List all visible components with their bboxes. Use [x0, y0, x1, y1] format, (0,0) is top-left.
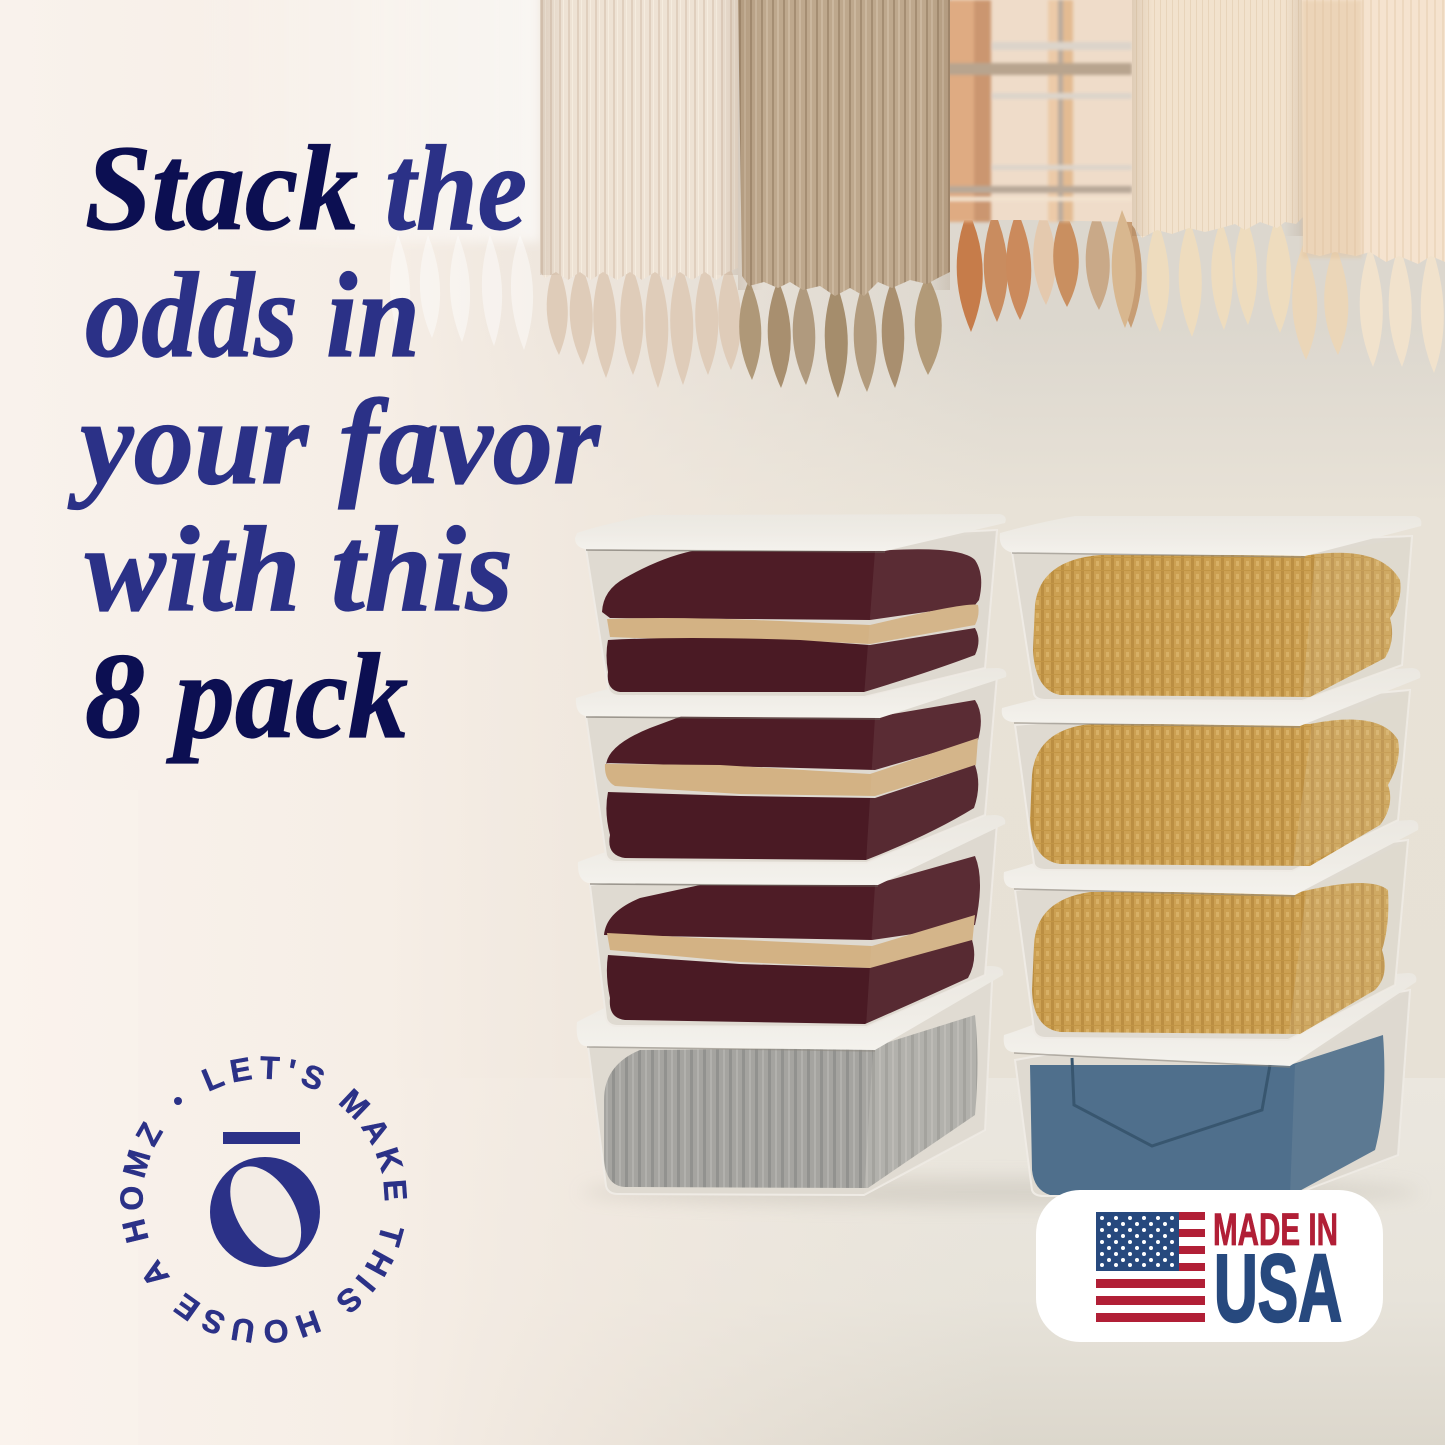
left stack, box 3: burgundy and tan [578, 815, 1005, 1027]
floor shadow under the box stacks [580, 1178, 1420, 1206]
badge wording: USA [1214, 1235, 1342, 1342]
scarf D: peach rib [1112, 0, 1305, 337]
scarves hanging along the top [190, 0, 1445, 398]
headline: the [385, 121, 527, 256]
badge wording: MADE IN [1213, 1204, 1338, 1255]
badge: Made in USA [1036, 1190, 1383, 1342]
headline: 8 pack [85, 629, 408, 764]
scarf C: plaid [944, 0, 1142, 332]
scarf E: peach rib at right edge [1292, 0, 1445, 373]
brand seal: Let's make this house a Homz [120, 1056, 408, 1343]
faded white scarves [190, 0, 540, 350]
scarf B: taupe rib [738, 0, 950, 398]
logo mark: O with macron [210, 1132, 320, 1270]
left stack, box 4: grey knit [577, 966, 1003, 1195]
badge wording [1213, 1204, 1342, 1342]
headline [67, 121, 602, 764]
headline: with this [85, 502, 513, 637]
right stack, box 4: denim [1004, 973, 1416, 1196]
left stack, box 2: burgundy and tan [576, 668, 1006, 863]
headline: Stack [85, 121, 358, 256]
headline: odds in [85, 248, 420, 383]
storage box stacks [575, 514, 1421, 1196]
right stack, box 2: mustard knit [1002, 668, 1420, 871]
left stack, box 1: burgundy and tan [575, 514, 1006, 697]
circular slogan: LET'S MAKE THIS HOUSE A HOMZ [120, 1056, 408, 1343]
right stack, box 3: mustard knit [1004, 820, 1418, 1040]
icon: American flag [1096, 1212, 1205, 1322]
scarf A: cream rib [540, 0, 741, 388]
headline: your favor [67, 375, 602, 510]
right stack, box 1: mustard knit [1000, 516, 1421, 701]
